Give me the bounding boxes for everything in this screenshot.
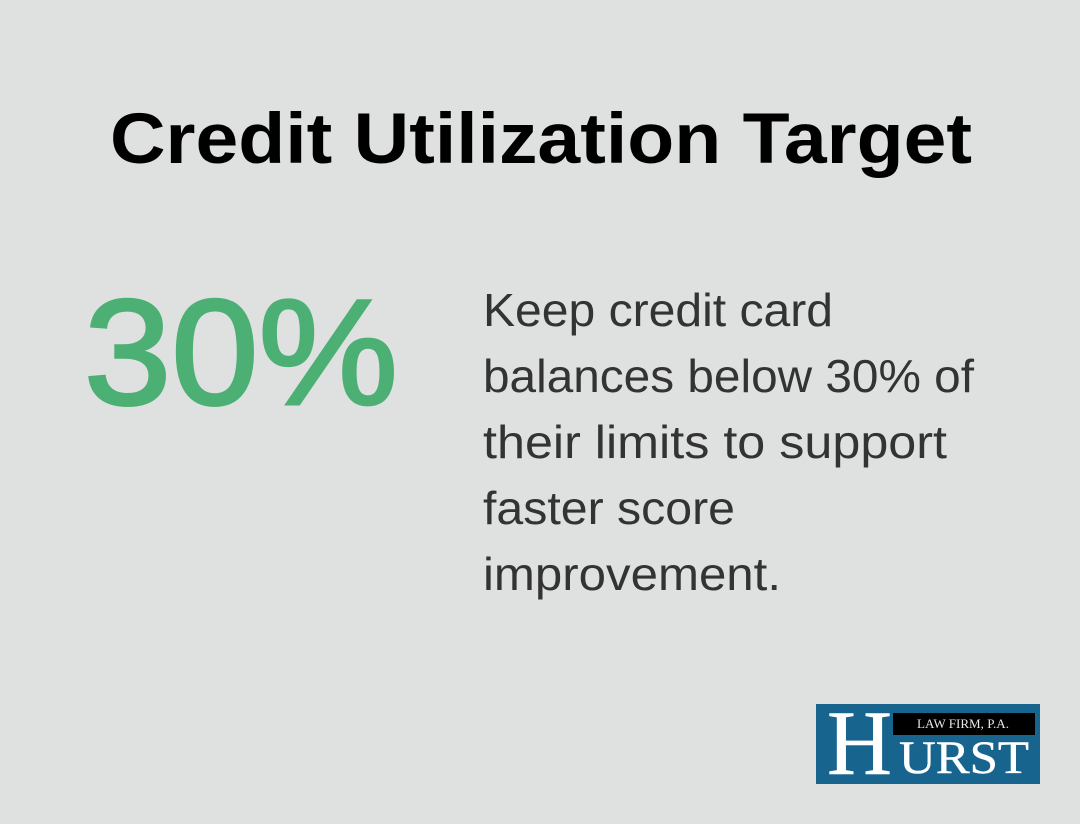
description text: [483, 284, 974, 600]
description text: their limits to support: [483, 416, 947, 468]
description text: improvement.: [483, 548, 781, 600]
description text: balances below 30% of: [483, 350, 974, 402]
big stat: 30%: 30%: [84, 268, 398, 436]
description text: faster score: [483, 482, 735, 534]
logo: Hurst Law Firm: H: [827, 692, 892, 794]
logo: Hurst Law Firm: [816, 692, 1040, 794]
title: Credit Utilization Target: [110, 100, 972, 179]
logo: Hurst Law Firm: URST: [899, 732, 1029, 784]
logo: Hurst Law Firm: LAW FIRM, P.A.: [917, 716, 1009, 731]
description text: Keep credit card: [483, 284, 833, 336]
